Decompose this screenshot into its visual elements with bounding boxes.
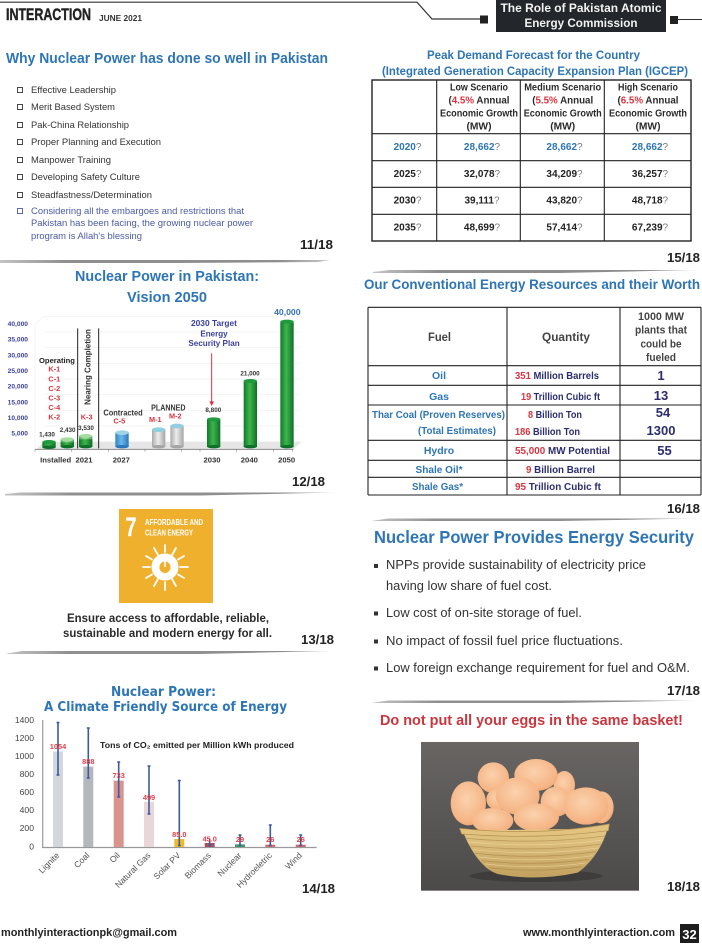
checklist: Developing Safety Culture <box>31 171 140 182</box>
panel: peak demand forecast <box>372 48 700 265</box>
value labels: 26 <box>297 835 305 844</box>
table header: (MW) <box>466 120 492 132</box>
table rows: 2020? <box>394 142 422 153</box>
x axis labels: 2027 <box>113 455 130 464</box>
bar: 2030 8,800 <box>207 417 220 448</box>
category labels: Solar PV <box>151 850 183 881</box>
basket <box>460 824 609 878</box>
issue date: JUNE 2021 <box>99 14 143 23</box>
planned: M-2 <box>169 412 182 421</box>
table: peak demand <box>372 80 691 241</box>
table header: (6.5% Annual <box>618 95 679 107</box>
y axis labels <box>15 715 34 852</box>
fuel column: Thar Coal (Proven Reserves) <box>372 409 505 421</box>
y axis labels: 600 <box>20 787 34 797</box>
fuel column: (Total Estimates) <box>418 425 496 437</box>
table rows: 28,662? <box>632 142 669 153</box>
caption: Ensure access to affordable, reliable, <box>67 611 269 625</box>
y axis labels: 800 <box>20 769 34 779</box>
heading: Peak Demand Forecast for the Country <box>427 48 640 62</box>
eggs <box>451 759 614 833</box>
panel: why nuclear power has done so well <box>6 51 333 252</box>
fuel column: Hydro <box>424 445 454 457</box>
table header: Fuel <box>428 330 451 344</box>
page header <box>0 0 702 32</box>
bar: installed 2,430 <box>61 437 74 448</box>
slide number: 18/18 <box>667 879 700 894</box>
bar: planned M-2 <box>170 424 184 448</box>
table header: (5.5% Annual <box>532 95 593 107</box>
table rows: 43,820? <box>546 196 583 207</box>
bar: 2021 3,530 <box>79 434 92 448</box>
icon: sdg 7 affordable and clean energy: 7 <box>126 512 136 542</box>
bar: 2040 21,000 <box>244 379 257 448</box>
panel: sdg 7 <box>63 509 334 647</box>
panel: eggs in one basket <box>380 712 700 894</box>
operating units <box>39 358 75 421</box>
heading: Do not put all your eggs in the same basket! <box>380 712 683 729</box>
checklist: Pakistan has been facing, the growing nuclear power <box>31 217 253 228</box>
bar: contracted 2027 <box>115 430 129 448</box>
quantity column <box>515 371 610 493</box>
category labels <box>36 850 304 890</box>
value labels <box>50 742 305 844</box>
value labels: 1054 <box>50 742 67 751</box>
magazine name: INTERACTION <box>6 6 91 24</box>
value labels: 8,800 <box>205 407 222 414</box>
y axis labels: 15,000 <box>8 399 28 406</box>
operating units: C-2 <box>48 384 60 393</box>
checklist: Pak-China Relationship <box>31 119 129 130</box>
icon: sdg 7 affordable and clean energy: CLEAN ENERGY <box>145 528 193 538</box>
table header: (4.5% Annual <box>448 95 510 107</box>
icon: sdg 7 affordable and clean energy <box>119 509 213 603</box>
caption: sustainable and modern energy for all. <box>63 626 272 640</box>
bar: planned M-1 <box>152 427 165 448</box>
quantity column: 95 Trillion Cubic ft <box>515 482 602 493</box>
value labels: 85.0 <box>172 830 186 839</box>
2030 target label: 2030 Target <box>191 318 237 328</box>
table rows <box>394 142 669 234</box>
category labels: Hydroeletric <box>234 850 274 890</box>
slide number: 17/18 <box>667 683 700 698</box>
category labels: Biomass <box>183 850 213 881</box>
panel: climate friendly source of energy <box>15 685 335 896</box>
x axis labels: 2021 <box>75 455 93 464</box>
table header: Medium Scenario <box>524 82 601 94</box>
y axis labels: 5,000 <box>11 431 28 438</box>
bar chart: vision 2050 capacity <box>8 307 302 464</box>
value labels: 3,530 <box>78 425 94 432</box>
quantity column: 351 Million Barrels <box>515 371 599 382</box>
bullet list <box>374 558 690 675</box>
y axis labels: 1000 <box>15 751 34 761</box>
chart caption: Tons of CO₂ emitted per Million kWh produced <box>100 740 294 750</box>
checklist: Considering all the embargoes and restrictions that <box>31 205 244 216</box>
table header: Quantity <box>542 330 590 344</box>
table rows: 2030? <box>394 196 422 207</box>
y axis labels: 0 <box>29 842 34 852</box>
table header: Low Scenario <box>450 82 508 94</box>
heading: Nuclear Power in Pakistan: <box>75 268 259 285</box>
2030 target label: Energy <box>200 328 228 338</box>
bullet list: No impact of fossil fuel price fluctuations. <box>386 634 623 648</box>
slide number: 14/18 <box>302 881 335 896</box>
fuel column: Shale Gas* <box>412 481 464 493</box>
bullet list: Low cost of on-site storage of fuel. <box>386 606 582 620</box>
category labels: Nuclear <box>215 850 244 878</box>
bar: installed 1,430 <box>42 440 56 449</box>
chart: tons of co2 per million kwh <box>15 715 317 890</box>
checklist: Proper Planning and Execution <box>31 136 161 147</box>
y axis labels: 1400 <box>15 715 34 725</box>
x axis labels: 2040 <box>241 455 258 464</box>
planned: M-1 <box>149 415 162 424</box>
checklist: Manpower Training <box>31 154 111 165</box>
category labels: Lignite <box>36 850 62 875</box>
checklist <box>18 84 253 241</box>
footer <box>1 924 699 943</box>
y axis labels: 20,000 <box>8 384 28 391</box>
value labels <box>39 371 260 439</box>
header title box: The Role of Pakistan Atomic <box>500 1 662 15</box>
arrow: to 2030 <box>209 353 214 406</box>
slide number: 16/18 <box>667 501 700 516</box>
quantity column: 19 Trillion Cubic ft <box>521 392 601 403</box>
planned: PLANNED <box>151 402 185 412</box>
value labels: 2,430 <box>60 427 76 434</box>
2030 target label: Security Plan <box>188 338 240 348</box>
value labels: 888 <box>82 757 94 766</box>
checklist: program is Allah's blessing <box>31 230 142 241</box>
bars <box>53 752 306 847</box>
y axis labels: 25,000 <box>8 368 28 375</box>
panel: nuclear power in pakistan vision 2050 <box>8 268 325 489</box>
slide number: 15/18 <box>667 250 700 265</box>
operating units: K-1 <box>48 365 60 374</box>
table header: High Scenario <box>618 82 678 94</box>
checklist: Merit Based System <box>31 101 115 112</box>
heading: A Climate Friendly Source of Energy <box>44 700 287 715</box>
checklist: Steadfastness/Determination <box>31 189 152 200</box>
operating units: C-3 <box>48 393 60 402</box>
table header: could be <box>640 338 682 350</box>
plants column <box>647 368 675 458</box>
table rows: 48,718? <box>632 196 669 207</box>
bullet list: having low share of fuel cost. <box>386 579 552 593</box>
table header: fueled <box>646 352 676 364</box>
y axis labels <box>8 321 28 438</box>
nearing completion: K-3 <box>81 412 93 421</box>
table rows: 34,209? <box>546 169 583 180</box>
category labels: Oil <box>107 850 122 865</box>
table header: Economic Growth <box>524 108 602 120</box>
quantity column: 186 Billion Ton <box>515 427 580 438</box>
header title box <box>496 0 666 32</box>
value labels: 21,000 <box>240 371 260 378</box>
planned <box>149 402 185 424</box>
table rows: 57,414? <box>546 223 583 234</box>
table rows: 2025? <box>394 169 422 180</box>
table header <box>440 82 687 132</box>
table header: 1000 MW <box>638 311 684 323</box>
table header: (MW) <box>550 120 575 132</box>
heading <box>44 685 287 715</box>
quantity column: 55,000 MW Potential <box>515 446 610 457</box>
bar: 2050 40,000 <box>280 320 294 448</box>
category labels: Natural Gas <box>113 850 152 890</box>
slide number: 12/18 <box>292 474 325 489</box>
y axis labels: 200 <box>20 823 34 833</box>
table rows: 39,111? <box>464 196 500 207</box>
table rows: 48,699? <box>464 223 501 234</box>
plants column: 55 <box>657 443 672 458</box>
table rows: 28,662? <box>464 142 501 153</box>
heading: Nuclear Power: <box>111 685 216 700</box>
nearing completion <box>81 329 93 421</box>
operating units: C-1 <box>48 374 60 383</box>
heading: Why Nuclear Power has done so well in Pakistan <box>6 51 328 67</box>
2030 target label <box>188 318 240 348</box>
table: fuel resources <box>368 307 701 495</box>
category labels: Wind <box>283 850 304 871</box>
y axis labels: 1200 <box>15 733 34 743</box>
plants column: 54 <box>656 405 671 420</box>
table rows: 67,239? <box>632 223 669 234</box>
table header: plants that <box>635 324 687 336</box>
plants column: 1 <box>657 368 665 383</box>
x axis labels <box>40 455 295 464</box>
table header: Economic Growth <box>609 108 687 120</box>
fuel column <box>372 370 505 493</box>
page number <box>680 924 699 943</box>
contracted: Contracted <box>103 407 143 417</box>
value labels: 1,430 <box>39 432 55 439</box>
x axis labels: 2030 <box>203 455 221 464</box>
slide number: 11/18 <box>300 237 333 252</box>
value labels: 733 <box>113 771 125 780</box>
contracted <box>103 407 143 425</box>
x axis labels: Installed <box>40 455 72 464</box>
x axis labels: 2050 <box>278 455 295 464</box>
contracted: C-5 <box>113 416 125 425</box>
table header: Economic Growth <box>440 108 518 120</box>
value labels: 26 <box>266 835 274 844</box>
illustration: eggs in a basket <box>421 742 639 891</box>
header title box: Energy Commission <box>524 16 638 30</box>
fuel column: Gas <box>429 391 449 403</box>
category labels: Coal <box>72 850 91 870</box>
y axis labels: 10,000 <box>8 415 28 422</box>
error bars <box>56 722 302 846</box>
panel: energy security <box>374 527 700 698</box>
panel: conventional energy resources <box>364 277 701 516</box>
value labels: 29 <box>236 835 244 844</box>
quantity column: 8 Billion Ton <box>528 410 582 421</box>
heading <box>382 48 688 78</box>
icon: sdg 7 affordable and clean energy: AFFORDABLE AND <box>145 517 203 527</box>
table rows: 36,257? <box>632 169 669 180</box>
heading: Our Conventional Energy Resources and their Worth <box>364 277 700 292</box>
website: www.monthlyinteraction.com <box>522 927 675 939</box>
y axis labels: 30,000 <box>8 352 28 359</box>
fuel column: Shale Oil* <box>416 464 463 476</box>
bullet list: Low foreign exchange requirement for fuel and O&M. <box>386 661 690 675</box>
table rows: 32,078? <box>464 169 501 180</box>
y axis labels: 400 <box>20 805 34 815</box>
heading: Vision 2050 <box>127 289 207 306</box>
operating units: Operating <box>39 358 75 365</box>
value labels: 499 <box>143 793 155 802</box>
nearing completion: Nearing Completion <box>84 329 93 405</box>
page number: 32 <box>682 927 697 942</box>
checklist: Effective Leadership <box>31 84 116 95</box>
y axis labels: 35,000 <box>8 337 28 344</box>
slide number: 13/18 <box>301 632 334 647</box>
label: 40,000: 40,000 <box>274 307 301 317</box>
value labels: 45.0 <box>203 834 217 844</box>
table rows: 2035? <box>394 223 422 234</box>
table rows: 28,662? <box>546 142 583 153</box>
table header: (MW) <box>636 120 660 132</box>
quantity column: 9 Billion Barrel <box>526 465 595 476</box>
email: monthlyinteractionpk@gmail.com <box>1 927 177 939</box>
plants column: 1300 <box>647 423 675 438</box>
operating units: C-4 <box>48 403 61 412</box>
fuel column: Oil <box>432 370 446 382</box>
table header <box>428 311 687 364</box>
operating units: K-2 <box>48 412 60 421</box>
bullet list: NPPs provide sustainability of electricity price <box>386 558 646 572</box>
heading <box>75 268 259 306</box>
plants column: 13 <box>654 388 668 403</box>
caption <box>63 611 272 640</box>
y axis labels: 40,000 <box>8 321 28 328</box>
